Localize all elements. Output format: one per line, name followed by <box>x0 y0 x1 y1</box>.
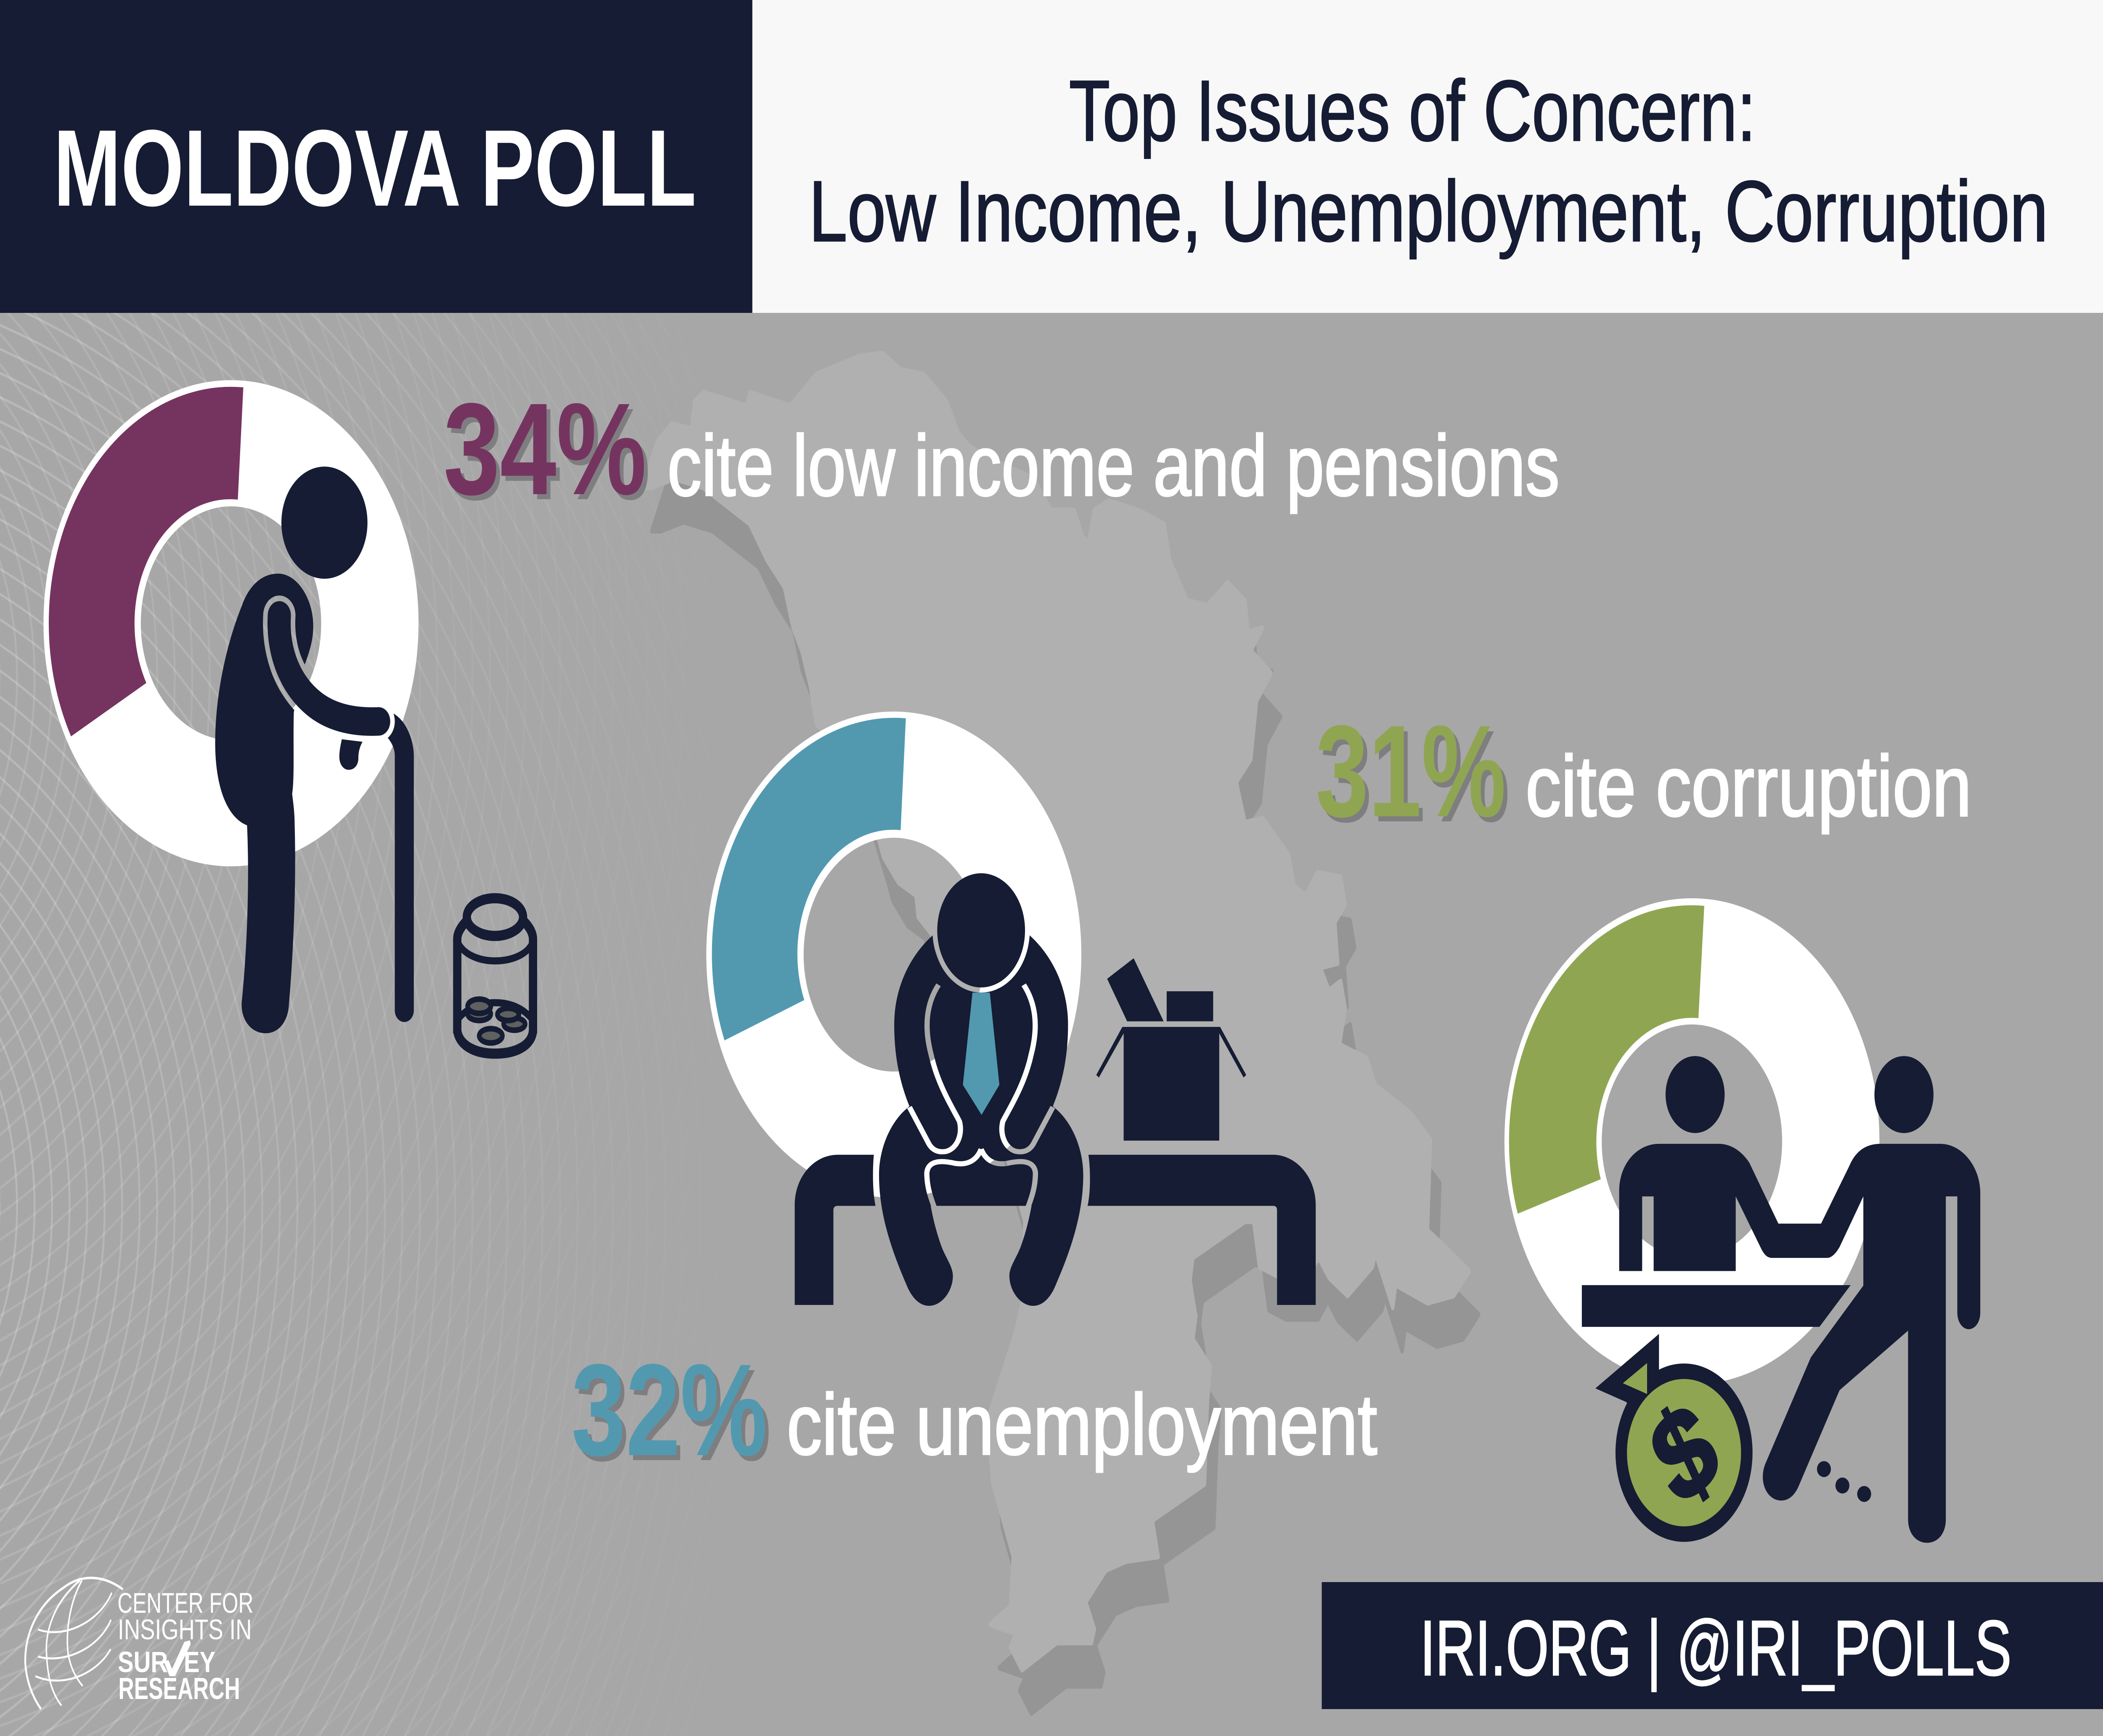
logo text <box>117 1587 253 1706</box>
icon: two people exchanging under the table <box>1582 1056 1980 1543</box>
logo text: CENTER FOR <box>117 1587 253 1619</box>
subtitle line 1: Top Issues of Concern: <box>1069 62 1756 159</box>
panel: low income and pensions <box>49 376 1560 1053</box>
map of Moldova <box>643 353 1479 1713</box>
percentage: 34%: 34% <box>443 376 646 522</box>
donut chart: 31% <box>1509 905 1831 1321</box>
percentage: 32%: 32% <box>575 1342 771 1488</box>
icon: seated dejected man on bench <box>795 873 1316 1306</box>
logo text: RESEARCH <box>119 1672 240 1706</box>
label: corruption: cite corruption <box>1526 738 1972 834</box>
icon: jar of coins <box>457 898 533 1053</box>
label: low income and pensions: cite low income and pensions <box>667 417 1560 514</box>
subtitle line 2: Low Income, Unemployment, Corruption <box>809 163 2048 259</box>
icon: check mark <box>164 1641 191 1676</box>
donut chart: 32% <box>712 718 1033 1135</box>
logo text: SURVEY <box>118 1646 215 1679</box>
percentage: 34%: 34% <box>448 381 651 527</box>
footer text: IRI.ORG | @IRI_POLLS <box>1420 1605 2011 1692</box>
logo text: INSIGHTS IN <box>118 1613 252 1646</box>
label: unemployment: cite unemployment <box>787 1376 1377 1473</box>
panel: corruption <box>1316 698 1980 1543</box>
percentage: 31%: 31% <box>1316 698 1506 844</box>
icon: globe <box>25 1578 123 1709</box>
donut chart: 34% <box>49 387 370 803</box>
icon: box of office belongings <box>1096 958 1246 1141</box>
footer bar: website and handle <box>1322 1582 2103 1709</box>
percentage: 31%: 31% <box>1319 703 1510 849</box>
background line pattern <box>0 313 518 1736</box>
icon: elderly man with cane <box>215 467 414 1033</box>
panel: unemployment <box>571 718 1377 1488</box>
icon: money bag <box>1595 1334 1753 1542</box>
percentage: 32%: 32% <box>571 1337 767 1483</box>
logo: Center for Insights in Survey Research <box>25 1578 253 1709</box>
icon: money bag: $ <box>1633 1374 1735 1532</box>
header panel: subtitle block <box>752 0 2103 313</box>
header panel: left title block <box>0 0 752 313</box>
title: MOLDOVA POLL <box>53 108 696 229</box>
